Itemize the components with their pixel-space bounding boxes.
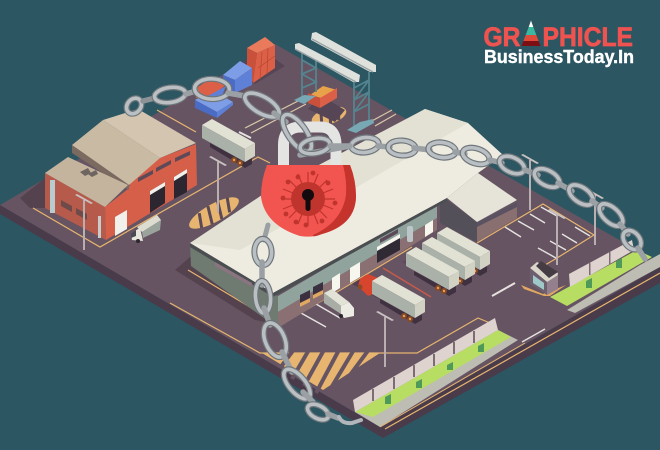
yard road markings <box>33 100 660 429</box>
logo: Graphicle <box>484 20 633 52</box>
street lamps <box>75 154 604 367</box>
icon: virus keyhole <box>281 171 337 227</box>
logo: Graphicle: PHICLE <box>542 22 633 52</box>
chain over shackle <box>299 136 350 156</box>
hazard stripes: crane oval <box>309 102 349 130</box>
white delivery truck <box>324 289 354 318</box>
lock shackle <box>284 127 336 170</box>
logo: Graphicle: GR <box>484 22 520 52</box>
guard booth <box>521 261 566 296</box>
right wall with green verge <box>550 240 660 313</box>
padlock body <box>261 165 356 237</box>
hazard stripes: left oval <box>185 192 243 234</box>
logo triangle <box>522 20 540 46</box>
left white truck <box>131 215 161 243</box>
chain: lower run <box>254 225 361 423</box>
parked trailers <box>383 227 490 297</box>
main warehouse <box>190 109 517 328</box>
red warehouse <box>45 109 197 240</box>
containers <box>195 37 285 118</box>
red truck with trailer <box>352 274 425 324</box>
gantry crane <box>294 32 376 133</box>
hazard stripes: front triangle <box>262 348 380 393</box>
chain: right run <box>300 136 645 259</box>
top trailer <box>202 119 255 168</box>
parking bars <box>239 132 590 342</box>
lower wall with green verge <box>353 318 525 427</box>
chain: top left run <box>123 78 317 156</box>
logo: BusinessToday.In: BusinessToday.In <box>484 47 634 67</box>
